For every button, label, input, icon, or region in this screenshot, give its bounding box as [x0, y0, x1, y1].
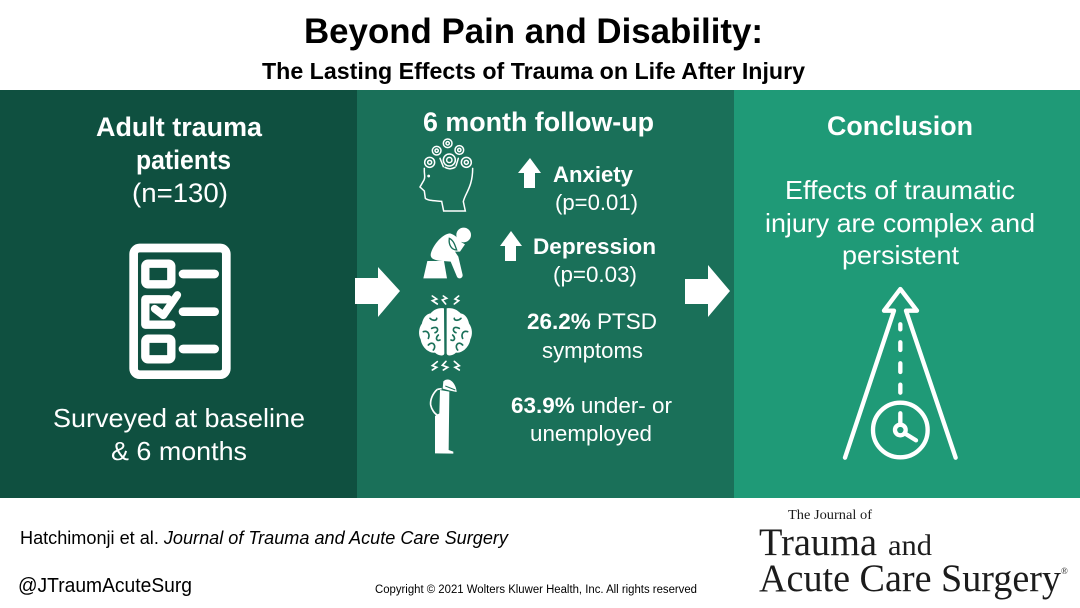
stat: employment: 63.9% under- or	[511, 393, 672, 418]
heading: patients: patients	[136, 145, 231, 175]
panel: conclusion	[734, 90, 1080, 498]
text: conclusion statement: injury are complex and	[765, 208, 1035, 238]
title	[262, 12, 805, 84]
heading: conclusion: Conclusion	[827, 111, 973, 141]
heading: patients: (n=130)	[132, 178, 228, 208]
icon: seated person with head in hands	[423, 228, 471, 278]
stat: depression	[500, 231, 656, 287]
icon: brain with sparks	[419, 296, 472, 370]
citation: Hatchimonji et al. Journal of Trauma and Acute Care Surgery	[20, 527, 510, 548]
stat: PTSD: symptoms	[542, 338, 643, 363]
stat: employment: unemployed	[530, 421, 652, 446]
text: survey timing	[53, 403, 305, 466]
journal logo: and	[888, 529, 932, 562]
text: conclusion statement: Effects of traumatic	[785, 175, 1015, 205]
text: conclusion statement	[765, 175, 1035, 270]
journal logo: ®	[1061, 566, 1068, 576]
stat: anxiety: Anxiety	[553, 162, 634, 187]
icon: up arrow	[500, 231, 522, 261]
panel: 6 month follow-up	[357, 90, 734, 498]
icon: road arrow with clock	[845, 289, 956, 458]
stat: employment	[511, 393, 672, 446]
icon: standing person looking down	[431, 380, 457, 454]
arrow: patients to follow-up	[355, 267, 400, 317]
stat: PTSD	[527, 309, 657, 363]
arrow: follow-up to conclusion	[685, 265, 730, 317]
heading: follow-up: 6 month follow-up	[423, 107, 654, 137]
icon: head with spirals	[420, 139, 473, 211]
journal logo: Acute Care Surgery	[759, 557, 1061, 600]
panel: adult trauma patients	[0, 90, 357, 498]
journal logo: Trauma	[759, 521, 877, 564]
title: Beyond Pain and Disability:	[304, 12, 763, 51]
text: survey timing: & 6 months	[111, 436, 247, 466]
heading: patients	[96, 112, 263, 208]
stat: anxiety	[518, 158, 638, 215]
journal logo	[759, 507, 1068, 600]
icon: up arrow	[518, 158, 541, 188]
text: survey timing: Surveyed at baseline	[53, 403, 305, 433]
title: The Lasting Effects of Trauma on Life After Injury	[262, 58, 805, 84]
stat: depression: (p=0.03)	[553, 262, 637, 287]
stat: depression: Depression	[533, 234, 656, 259]
heading: patients: Adult trauma	[96, 112, 263, 142]
icon: checklist	[134, 248, 226, 375]
text: conclusion statement: persistent	[842, 240, 960, 270]
journal logo: The Journal of	[788, 507, 873, 522]
stat: anxiety: (p=0.01)	[555, 190, 638, 215]
stat: PTSD: 26.2% PTSD	[527, 309, 657, 334]
copyright: Copyright © 2021 Wolters Kluwer Health, Inc. All rights reserved	[375, 584, 697, 596]
social handle: @JTraumAcuteSurg	[18, 575, 192, 597]
